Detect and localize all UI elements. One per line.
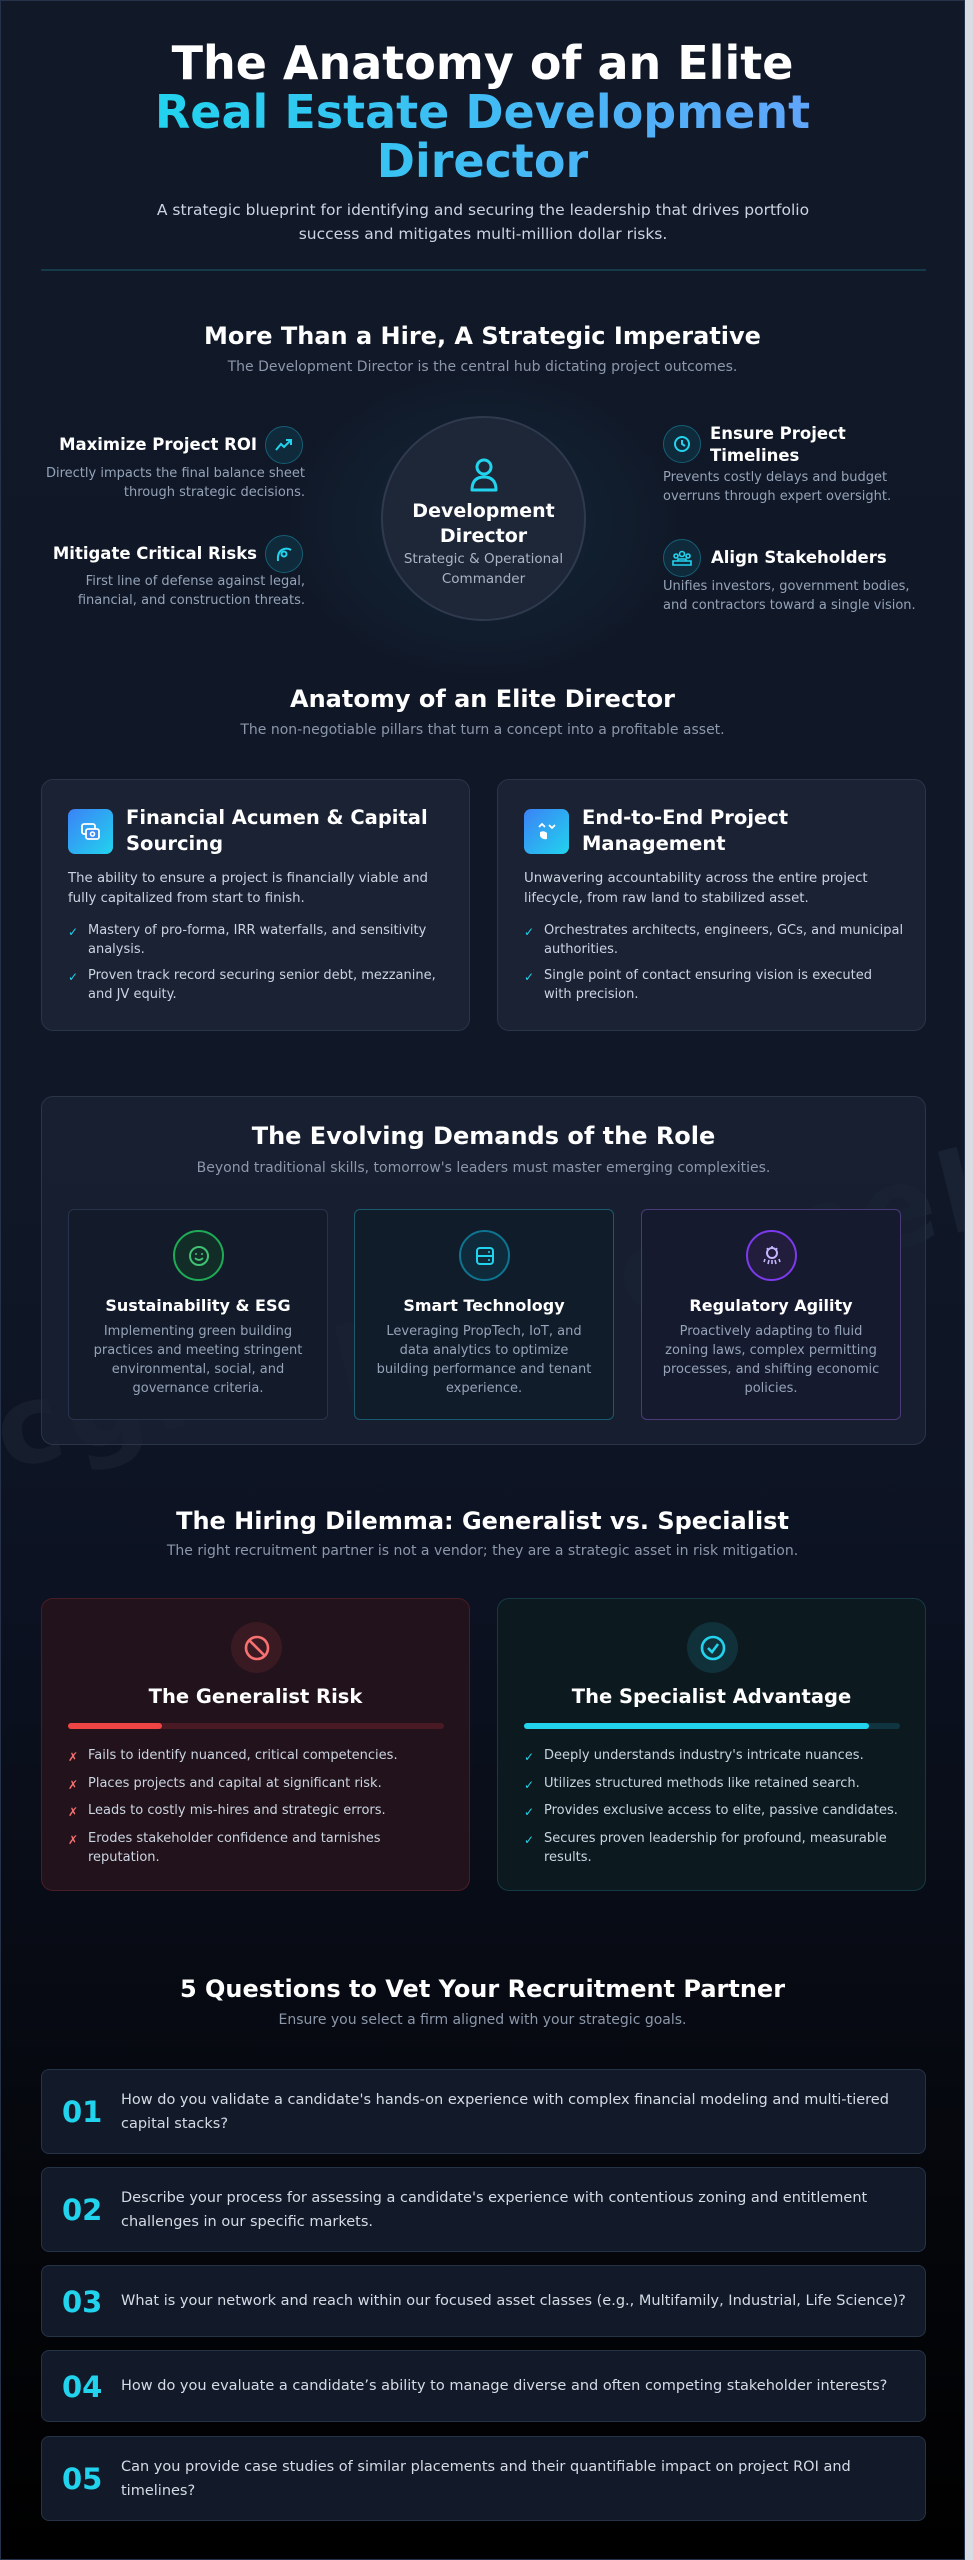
card: specialist advantage: Provides exclusive access to elite, passive candidates. [544, 1803, 898, 1818]
card: financial acumen: Financial Acumen & Capital Sourcing [126, 806, 428, 855]
card: generalist risk: ✗ [68, 1778, 78, 1792]
icon: gear [746, 1230, 797, 1281]
card: specialist advantage: Utilizes structured methods like retained search. [544, 1776, 860, 1791]
question 04 [41, 2350, 926, 2422]
card: specialist advantage: The Specialist Advantage [572, 1685, 851, 1708]
card: generalist risk: Leads to costly mis-hires and strategic errors. [88, 1803, 386, 1818]
bar: risk [68, 1723, 444, 1729]
question 04: 04 [62, 2370, 102, 2404]
bar: advantage [524, 1723, 900, 1729]
title: The Anatomy of an Elite [172, 36, 793, 90]
card: project management: Unwavering accountability across the entire project lifecycle, from raw land to stabilized asset. [524, 871, 868, 906]
icon: ban [231, 1622, 282, 1673]
question 01: How do you validate a candidate's hands-on experience with complex financial modeling and multi-tiered capital stacks? [121, 2092, 889, 2132]
card: project management: ✓ [524, 970, 534, 984]
item: timelines: Ensure Project [710, 424, 846, 443]
card: financial acumen: ✓ [68, 970, 78, 984]
item: stakeholders [663, 539, 916, 613]
card: specialist advantage: Secures proven leadership for profound, measurable results. [544, 1831, 887, 1865]
question 03: What is your network and reach within our focused asset classes (e.g., Multifamily, Industrial, Life Science)? [121, 2293, 906, 2309]
item: risks: First line of defense against legal, financial, and construction threats. [78, 574, 305, 608]
item: ROI: Maximize Project ROI [59, 435, 257, 454]
heading: anatomy: Anatomy of an Elite Director [290, 685, 675, 713]
icon: trend [265, 426, 303, 464]
sub-card: ESG [68, 1209, 328, 1420]
question 01 [41, 2069, 926, 2154]
card: generalist risk: Places projects and capital at significant risk. [88, 1776, 382, 1791]
sub-card: regulatory: Proactively adapting to fluid zoning laws, complex permitting processes, and shifting economic policies. [663, 1324, 879, 1396]
sub-card: regulatory [641, 1209, 901, 1420]
icon: group [663, 539, 701, 577]
item: ROI [46, 426, 305, 500]
central circle: Development [412, 500, 555, 522]
question 02: 02 [62, 2193, 102, 2227]
card: specialist advantage: ✓ [524, 1805, 534, 1819]
card: financial acumen: Proven track record securing senior debt, mezzanine, and JV equity. [88, 968, 436, 1002]
sub-card: regulatory: Regulatory Agility [689, 1296, 853, 1315]
card: specialist advantage: ✓ [524, 1833, 534, 1847]
hub diagram [46, 416, 916, 621]
card: financial acumen: Mastery of pro-forma, IRR waterfalls, and sensitivity analysis. [88, 923, 426, 957]
card: financial acumen [41, 779, 470, 1031]
sub-card: smart tech: Leveraging PropTech, IoT, and data analytics to optimize building performance and tenant experience. [377, 1324, 591, 1396]
icon: shield [265, 535, 303, 573]
heading: questions: 5 Questions to Vet Your Recruitment Partner [180, 1975, 785, 2003]
item: timelines [663, 424, 891, 504]
item: ROI: Directly impacts the final balance sheet through strategic decisions. [46, 466, 305, 500]
question 03 [41, 2265, 926, 2337]
icon: check [687, 1622, 738, 1673]
card: project management: Single point of contact ensuring vision is executed with precision. [544, 968, 872, 1002]
card: generalist risk: ✗ [68, 1750, 78, 1764]
central circle [381, 416, 586, 621]
item: risks: Mitigate Critical Risks [53, 544, 257, 563]
question 03: 03 [62, 2285, 102, 2319]
card: financial acumen: The ability to ensure a project is financially viable and fully capitalized from start to finish. [68, 871, 428, 906]
card: generalist risk: ✗ [68, 1805, 78, 1819]
card: project management: Orchestrates architects, engineers, GCs, and municipal authorities. [544, 923, 903, 957]
title: Real Estate Development [155, 85, 810, 139]
card: generalist risk: ✗ [68, 1833, 78, 1847]
title: Director [377, 134, 588, 188]
card: generalist risk: Fails to identify nuanced, critical competencies. [88, 1748, 398, 1763]
heading: hiring dilemma: The Hiring Dilemma: Generalist vs. Specialist [176, 1507, 789, 1535]
subheading: The Development Director is the central hub dictating project outcomes. [228, 359, 737, 375]
card: project management: End-to-End Project Management [582, 806, 788, 855]
sub-card: ESG: Implementing green building practices and meeting stringent environmental, social, and governance criteria. [94, 1324, 302, 1396]
card: project management: ✓ [524, 925, 534, 939]
central circle: Strategic & Operational [404, 551, 563, 567]
item: stakeholders: Align Stakeholders [711, 548, 887, 567]
question 04: How do you evaluate a candidate’s ability to manage diverse and often competing stakeholder interests? [121, 2378, 887, 2394]
subheading: Beyond traditional skills, tomorrow's leaders must master emerging complexities. [197, 1160, 770, 1176]
card: specialist advantage: ✓ [524, 1778, 534, 1792]
sub-card: smart tech [354, 1209, 614, 1420]
subtitle: A strategic blueprint for identifying and securing the leadership that drives portfolio success and mitigates multi-million dollar risks. [157, 201, 809, 243]
card: specialist advantage: Deeply understands industry's intricate nuances. [544, 1748, 864, 1763]
question 01: 01 [62, 2095, 102, 2129]
question 05 [41, 2436, 926, 2521]
item: stakeholders: Unifies investors, government bodies, and contractors toward a single vision. [663, 579, 916, 613]
card: generalist risk [41, 1598, 470, 1891]
heading: The Evolving Demands of the Role [252, 1122, 715, 1150]
heading: strategic imperative: More Than a Hire, A Strategic Imperative [204, 322, 761, 350]
title [155, 36, 810, 188]
question 02: Describe your process for assessing a candidate's experience with contentious zoning and entitlement challenges in our specific markets. [121, 2190, 867, 2230]
item: timelines: Prevents costly delays and budget overruns through expert oversight. [663, 470, 891, 504]
item: timelines: Timelines [710, 446, 799, 465]
item: risks [53, 535, 305, 608]
icon: leaf [173, 1230, 224, 1281]
question 05: Can you provide case studies of similar placements and their quantifiable impact on project ROI and timelines? [121, 2459, 851, 2499]
card: generalist risk: Erodes stakeholder confidence and tarnishes reputation. [88, 1831, 381, 1865]
sub-card: ESG: Sustainability & ESG [105, 1296, 291, 1315]
central circle: Commander [442, 571, 525, 587]
card: financial acumen: ✓ [68, 925, 78, 939]
icon: clock [663, 425, 701, 463]
icon: person [470, 458, 498, 492]
subheading: The right recruitment partner is not a vendor; they are a strategic asset in risk mitigation. [167, 1543, 798, 1559]
question 05: 05 [62, 2462, 102, 2496]
icon: money [68, 809, 113, 854]
sub-card: smart tech: Smart Technology [403, 1296, 565, 1315]
card: generalist risk: The Generalist Risk [149, 1685, 362, 1708]
question 02 [41, 2167, 926, 2252]
card: project management [497, 779, 926, 1031]
card: specialist advantage [497, 1598, 926, 1891]
subheading: Ensure you select a firm aligned with your strategic goals. [278, 2012, 687, 2028]
card: specialist advantage: ✓ [524, 1750, 534, 1764]
central circle: Director [440, 525, 527, 547]
subheading: The non-negotiable pillars that turn a concept into a profitable asset. [240, 722, 725, 738]
icon: handshake [524, 809, 569, 854]
panel: evolving demands [41, 1096, 926, 1445]
icon: server [459, 1230, 510, 1281]
